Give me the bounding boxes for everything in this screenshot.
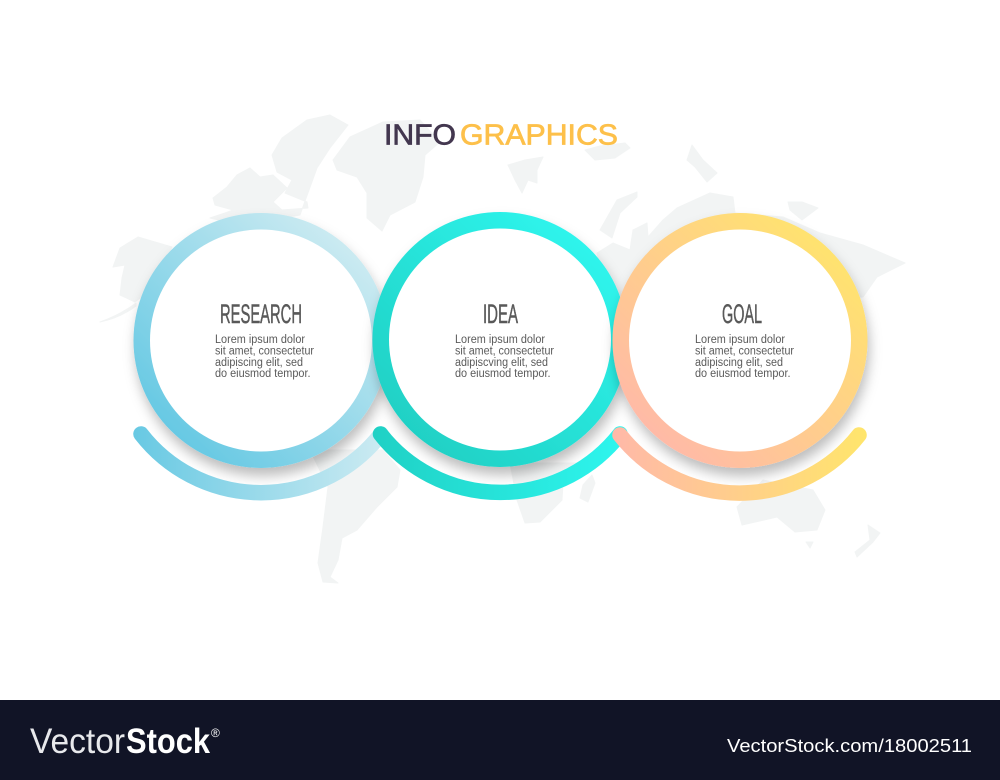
body: research: adipiscing elit, sed: [215, 357, 303, 369]
body: idea: [455, 334, 554, 380]
text block: goal: [695, 299, 794, 380]
arc: goal: [620, 435, 859, 493]
title: [384, 120, 618, 152]
body: research: Lorem ipsum dolor: [215, 334, 305, 346]
text block: research: [215, 299, 314, 380]
world map: [100, 115, 905, 583]
heading: goal: GOAL: [722, 299, 762, 329]
arc: research: [141, 434, 381, 493]
body: idea: Lorem ipsum dolor: [455, 334, 545, 346]
heading: research: RESEARCH: [220, 299, 302, 329]
heading: idea: IDEA: [483, 299, 518, 329]
body: goal: do eiusmod tempor.: [695, 368, 790, 380]
footer bar: [0, 700, 1000, 780]
body: idea: do eiusmod tempor.: [455, 368, 550, 380]
body: goal: [695, 334, 794, 380]
registered mark: ®: [211, 726, 220, 740]
text block: idea: [455, 299, 554, 380]
footer id: VectorStock.com/18002511: [727, 735, 972, 756]
circle: idea: [372, 212, 628, 467]
title: GRAPHICS: [460, 120, 618, 152]
arc: idea: [380, 434, 620, 492]
body: goal: Lorem ipsum dolor: [695, 334, 785, 346]
body: research: sit amet, consectetur: [215, 346, 314, 358]
footer logo: stock: Stock: [126, 722, 210, 761]
body: research: do eiusmod tempor.: [215, 368, 310, 380]
body: goal: sit amet, consectetur: [695, 346, 794, 358]
body: idea: sit amet, consectetur: [455, 346, 554, 358]
footer logo: vector: Vector: [30, 722, 125, 761]
circle: goal: [612, 213, 868, 468]
title: INFO: [384, 120, 456, 152]
circle: research: [134, 213, 388, 468]
body: idea: adipiscving elit, sed: [455, 357, 548, 369]
body: research: [215, 334, 314, 380]
body: goal: adipiscing elit, sed: [695, 357, 783, 369]
